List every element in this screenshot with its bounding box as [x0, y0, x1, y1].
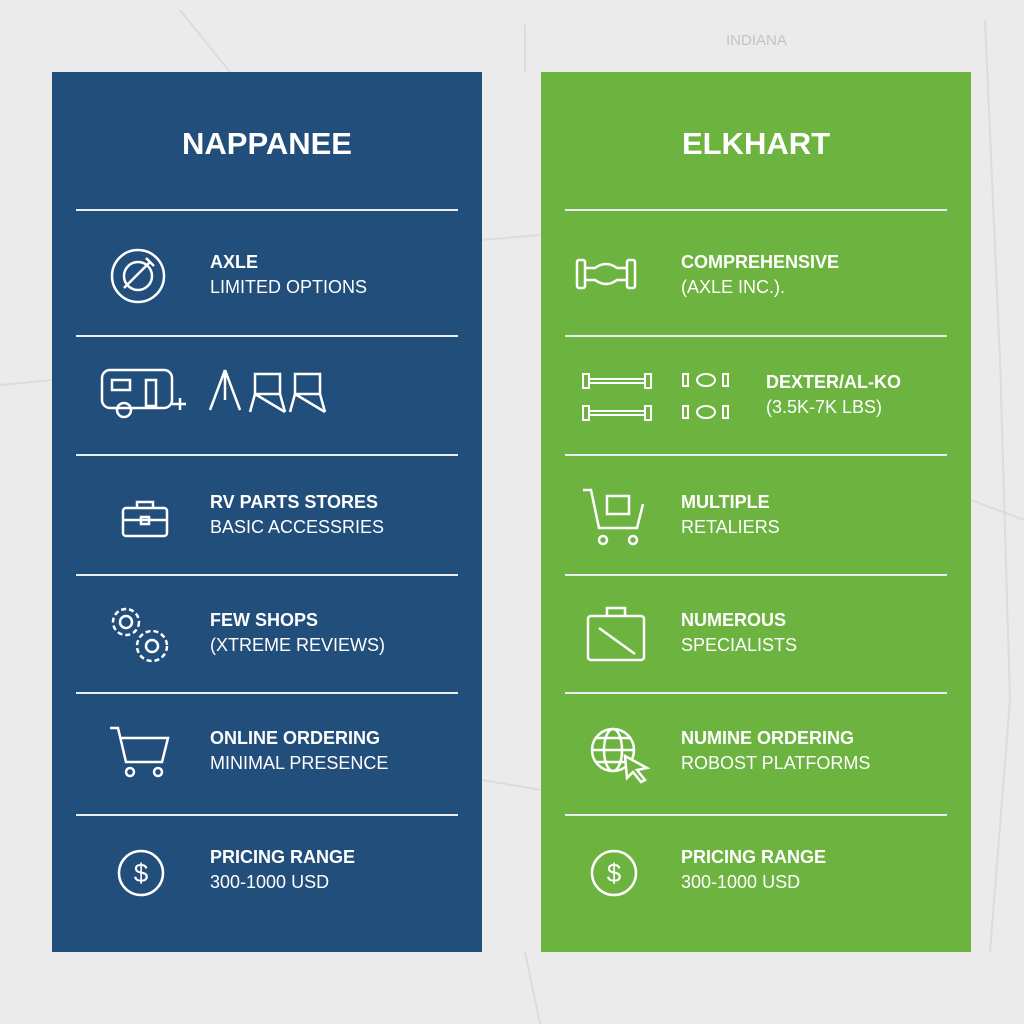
text: pricing: 300-1000 USD — [210, 872, 329, 892]
text: multiple: MULTIPLE — [681, 492, 770, 512]
text: dexter: (3.5K-7K LBS) — [766, 397, 882, 417]
icon: shopping cart — [583, 488, 644, 546]
text: online ordering — [681, 728, 870, 773]
text: online ordering: ONLINE ORDERING — [210, 728, 380, 748]
text: rv parts: RV PARTS STORES — [210, 492, 378, 512]
text: few shops: (XTREME REVIEWS) — [210, 635, 385, 655]
text: comprehensive — [681, 252, 839, 297]
text: rv parts: BASIC ACCESSRIES — [210, 517, 384, 537]
icon: axle — [576, 258, 636, 290]
icon: dollar: $ — [134, 858, 149, 888]
panel: Nappanee — [52, 72, 482, 952]
icon: dollar: $ — [607, 858, 622, 888]
text: comprehensive: (AXLE INC.). — [681, 277, 785, 297]
text: numerous: NUMEROUS — [681, 610, 786, 630]
panel: Elkhart — [541, 72, 971, 952]
text: online ordering: MINIMAL PRESENCE — [210, 753, 388, 773]
text: pricing: PRICING RANGE — [681, 847, 826, 867]
background map: INDIANA — [726, 32, 787, 49]
text: axle: AXLE — [210, 252, 258, 272]
text: pricing — [681, 847, 826, 892]
text: numerous — [681, 610, 797, 655]
icon: trailer and chairs — [100, 368, 326, 418]
text: pricing: 300-1000 USD — [681, 872, 800, 892]
heading: Nappanee: NAPPANEE — [182, 126, 352, 161]
text: comprehensive: COMPREHENSIVE — [681, 252, 839, 272]
text: axle — [210, 252, 367, 297]
icon: axles — [582, 373, 729, 421]
text: axle: LIMITED OPTIONS — [210, 277, 367, 297]
text: pricing — [210, 847, 355, 892]
icon: axle tools — [110, 248, 166, 304]
text: rv parts — [210, 492, 384, 537]
icon: globe — [590, 728, 650, 784]
heading: Elkhart: ELKHART — [682, 126, 830, 161]
text: dexter — [766, 372, 901, 417]
text: few shops — [210, 610, 385, 655]
icon: tool case — [586, 606, 646, 662]
text: pricing: PRICING RANGE — [210, 847, 355, 867]
text: online ordering: NUMINE ORDERING — [681, 728, 854, 748]
text: numerous: SPECIALISTS — [681, 635, 797, 655]
text: dexter: DEXTER/AL-KO — [766, 372, 901, 392]
icon: cart — [110, 726, 170, 778]
icon: dollar — [118, 850, 164, 896]
icon: toolbox — [122, 500, 168, 538]
icon: dollar — [590, 850, 638, 896]
text: multiple: RETALIERS — [681, 517, 780, 537]
text: multiple — [681, 492, 780, 537]
icon: gears — [112, 608, 168, 662]
text: online ordering: ROBOST PLATFORMS — [681, 753, 870, 773]
text: online ordering — [210, 728, 388, 773]
text: few shops: FEW SHOPS — [210, 610, 318, 630]
